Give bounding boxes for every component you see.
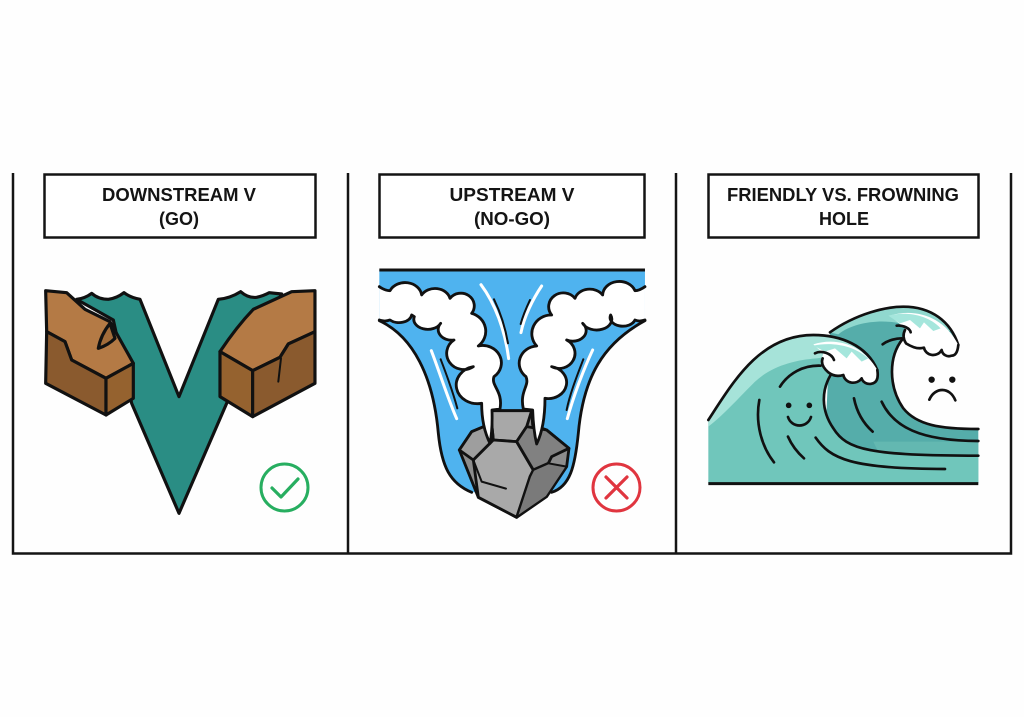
water outline [379,321,645,492]
right foam [519,281,645,444]
heading: upstream V (no-go) [380,174,644,238]
heading: downstream V (go) [44,174,316,238]
heading: downstream V (go): (GO) [159,209,199,229]
water tongue [77,292,282,513]
frowning face [928,376,955,400]
illustration: two waves with faces [708,307,978,484]
frowning back wave [823,307,978,483]
friendly front wave [708,335,978,483]
illustration: V-shaped water between rock banks [46,291,315,513]
heading: upstream V (no-go): UPSTREAM V [450,185,574,205]
left rock bank [46,291,133,415]
panel: downstream V [44,174,316,513]
friendly face [786,402,812,425]
illustration: water over rock with foam [379,270,645,517]
panel: friendly vs. frowning hole [708,174,978,484]
heading: friendly vs. frowning hole [708,174,978,238]
heading: downstream V (go): DOWNSTREAM V [102,185,256,205]
front foam [813,342,878,384]
left foam [379,283,501,443]
heading: friendly vs. frowning hole: HOLE [819,209,869,229]
panel: upstream V [379,174,645,517]
heading: upstream V (no-go): (NO-GO) [474,209,550,229]
icon: red cross [593,464,640,511]
icon: green check [261,464,308,511]
heading: friendly vs. frowning hole: FRIENDLY VS. FROWNING [727,185,959,205]
back foam [883,313,958,356]
frame: three-panel outline [13,173,1011,554]
boulder [459,411,569,517]
top edge line [379,265,645,274]
base line [708,479,978,488]
water body [379,270,645,492]
right rock bank [220,291,315,417]
spray streaks [431,285,593,419]
